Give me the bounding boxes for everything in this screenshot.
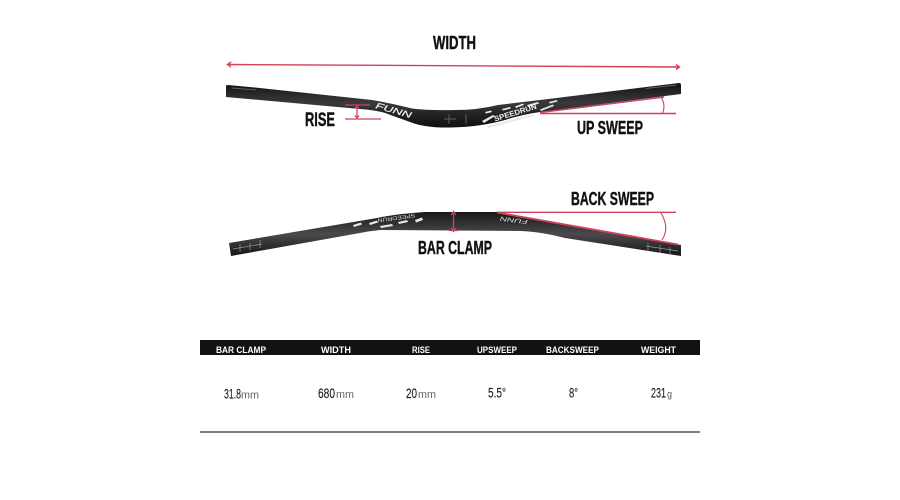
logo: FUNN on top bar: FUNN [499, 214, 528, 224]
table: specification header: UPSWEEP [477, 345, 517, 355]
grip markings: top bar ends [233, 240, 678, 255]
table: specification values: 31.8 [224, 386, 241, 402]
handlebar: top view [229, 212, 681, 256]
table: specification values [224, 384, 672, 402]
table: specification header: WIDTH [321, 345, 351, 355]
table: specification header: RISE [412, 345, 430, 355]
table: specification values: mm [418, 389, 436, 401]
table: specification values: 5.5° [488, 384, 506, 400]
grip markings: front bar ends [232, 85, 676, 124]
table: specification header [200, 340, 700, 355]
annotation: rise lines and arrow [345, 105, 381, 119]
annotation: back sweep angle [497, 212, 678, 244]
handlebar: front view [226, 83, 681, 128]
label: bar clamp: BAR CLAMP [418, 237, 492, 258]
label: up sweep: UP SWEEP [577, 118, 643, 138]
table: specification values: 231 [651, 384, 666, 400]
label: rise: RISE [305, 110, 335, 131]
table: bottom rule [200, 431, 700, 433]
arrow: width dimension [228, 62, 680, 70]
logo: speedrun text on top bar: SPEEDRUN [377, 212, 416, 223]
graphic: front bar stripes and speedrun logo: SPEEDRUN [493, 102, 538, 123]
table: specification values: 680 [318, 385, 335, 401]
table: specification values: mm [336, 389, 354, 401]
graphic: top bar stripes [353, 218, 423, 228]
table: specification header: BAR CLAMP [216, 345, 266, 355]
table: specification values: mm [241, 390, 259, 402]
annotation: bar clamp arrow [449, 212, 458, 232]
graphic: front bar stripes and speedrun logo [482, 100, 558, 128]
table: specification header: BACKSWEEP [546, 345, 599, 355]
annotation: up sweep angle [540, 97, 676, 114]
logo: FUNN on front bar: FUNN [374, 100, 414, 120]
table: specification values: 8° [569, 384, 578, 400]
heading: width: WIDTH [433, 33, 476, 53]
label: back sweep: BACK SWEEP [571, 189, 654, 209]
table: specification header: WEIGHT [641, 345, 676, 355]
table: specification values: 20 [406, 385, 417, 401]
table: specification values: g [667, 390, 672, 400]
